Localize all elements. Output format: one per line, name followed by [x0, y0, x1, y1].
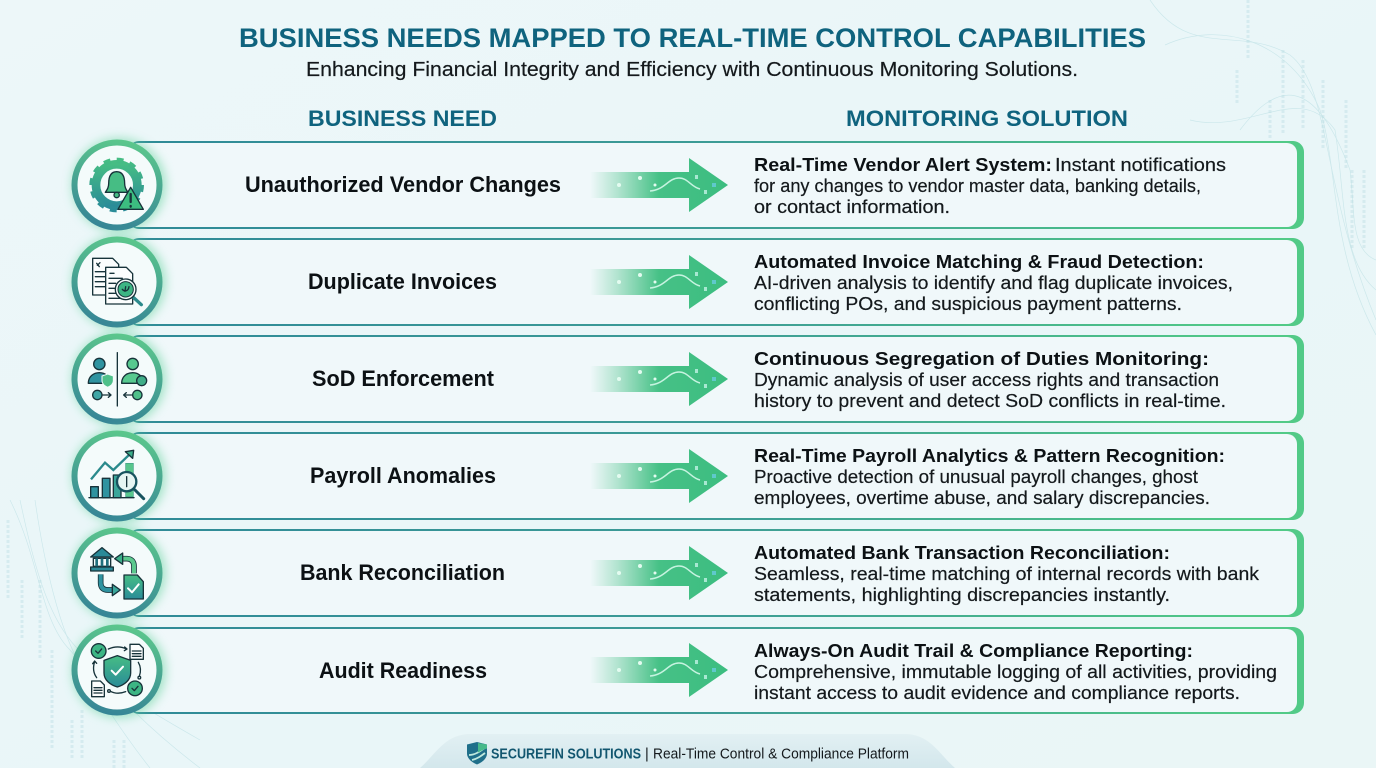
solution text: Real-Time Vendor Alert System: — [754, 154, 1052, 175]
column heading: business need: BUSINESS NEED — [308, 106, 497, 131]
footer text: Real-Time Control & Compliance Platform — [653, 746, 909, 762]
solution text: conflicting POs, and suspicious payment patterns. — [754, 293, 1182, 314]
solution text: or contact information. — [754, 196, 950, 217]
solution text: statements, highlighting discrepancies instantly. — [754, 584, 1170, 605]
solution text: for any changes to vendor master data, banking details, — [754, 175, 1201, 196]
solution text: Dynamic analysis of user access rights and transaction — [754, 369, 1219, 390]
solution text: history to prevent and detect SoD conflicts in real-time. — [754, 390, 1226, 411]
footer banner — [420, 734, 955, 768]
need label: Payroll Anomalies — [310, 463, 496, 488]
solution text: Comprehensive, immutable logging of all activities, providing — [754, 661, 1277, 682]
arrow — [590, 449, 728, 503]
icon: gear bell alert — [72, 140, 162, 230]
solution text — [754, 445, 1225, 508]
arrow — [590, 352, 728, 406]
footer text: SECUREFIN SOLUTIONS — [491, 746, 641, 762]
solution text — [754, 640, 1277, 703]
icon: documents magnifier — [72, 236, 162, 328]
icon: shield logo — [467, 742, 487, 764]
solution text: instant access to audit evidence and compliance reports. — [754, 682, 1240, 703]
solution text: Real-Time Payroll Analytics & Pattern Recognition: — [754, 445, 1225, 466]
icon: chart magnifier — [72, 430, 162, 522]
subtitle: Enhancing Financial Integrity and Efficiency with Continuous Monitoring Solutions. — [306, 58, 1078, 81]
solution text: Automated Bank Transaction Reconciliation: — [754, 542, 1170, 563]
icon: compliance shield cycle — [72, 624, 162, 716]
solution text — [754, 542, 1260, 605]
column heading: monitoring solution: MONITORING SOLUTION — [846, 106, 1128, 131]
solution text: Automated Invoice Matching & Fraud Detection: — [754, 251, 1204, 272]
solution text: Instant notifications — [1055, 154, 1226, 175]
solution text — [754, 251, 1233, 314]
solution text: employees, overtime abuse, and salary discrepancies. — [754, 487, 1210, 508]
solution text: Seamless, real-time matching of internal records with bank — [754, 563, 1260, 584]
panel: row 3 SoD enforcement — [72, 332, 1304, 426]
solution text: Proactive detection of unusual payroll changes, ghost — [754, 466, 1198, 487]
arrow — [590, 643, 728, 697]
solution text: Always-On Audit Trail & Compliance Reporting: — [754, 640, 1193, 661]
need label: Audit Readiness — [319, 658, 487, 683]
solution text: Continuous Segregation of Duties Monitoring: — [754, 348, 1209, 369]
panel: row 6 audit readiness — [72, 624, 1304, 718]
need label: Unauthorized Vendor Changes — [245, 172, 561, 197]
need label: Duplicate Invoices — [308, 269, 497, 294]
panel: row 4 payroll anomalies — [72, 429, 1304, 523]
arrow — [590, 255, 728, 309]
panel: row 2 duplicate invoices — [72, 235, 1304, 329]
panel: row 5 bank reconciliation — [72, 526, 1304, 620]
title: BUSINESS NEEDS MAPPED TO REAL-TIME CONTROL CAPABILITIES — [239, 23, 1146, 53]
footer text: | — [645, 746, 649, 762]
solution text — [754, 348, 1226, 411]
arrow — [590, 158, 728, 212]
panel: row 1 unauthorized vendor changes — [72, 138, 1304, 232]
solution text: AI-driven analysis to identify and flag duplicate invoices, — [754, 272, 1233, 293]
footer text — [491, 746, 909, 762]
need label: SoD Enforcement — [312, 366, 495, 391]
icon: segregated users — [72, 334, 162, 424]
solution text — [754, 154, 1226, 217]
arrow — [590, 546, 728, 600]
need label: Bank Reconciliation — [300, 560, 505, 585]
icon: bank document reconcile — [72, 528, 162, 618]
